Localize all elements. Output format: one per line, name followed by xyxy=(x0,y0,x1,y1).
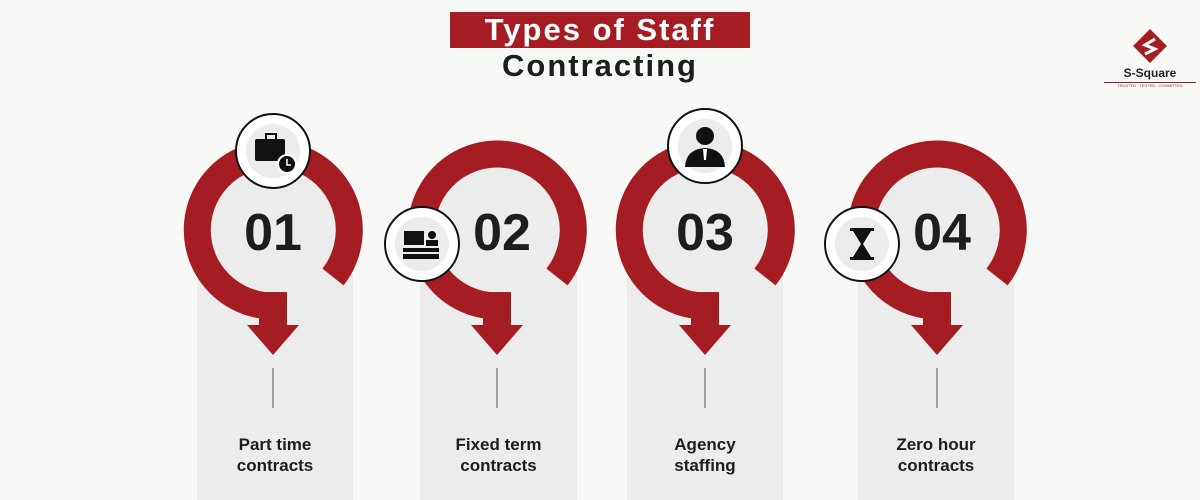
text: 03 xyxy=(676,204,734,262)
label 4: Zero hour xyxy=(896,435,976,454)
text: 04 xyxy=(913,204,971,262)
unit 01 xyxy=(197,154,349,408)
title line 1: Types of Staff xyxy=(485,12,715,47)
unit 02 xyxy=(421,154,573,408)
label 4: contracts xyxy=(898,456,974,475)
label 3 xyxy=(674,435,736,475)
unit 04 xyxy=(861,154,1013,408)
label 4 xyxy=(896,435,976,475)
label 3: Agency xyxy=(674,435,736,454)
text: 02 xyxy=(473,204,531,262)
logo xyxy=(1104,29,1196,88)
label 1 xyxy=(237,435,313,475)
title xyxy=(450,12,750,83)
numbers: 01 xyxy=(244,204,302,262)
icon: briefcase xyxy=(236,114,310,188)
logo: S-Square xyxy=(1124,66,1176,80)
label 2: contracts xyxy=(460,456,537,475)
label 1: contracts xyxy=(237,456,313,475)
icon: hourglass xyxy=(825,207,899,281)
unit 03 xyxy=(629,154,781,408)
panels xyxy=(197,270,1014,500)
label 2 xyxy=(456,435,541,475)
icon: person xyxy=(668,109,742,183)
label 2: Fixed term xyxy=(456,435,541,454)
label 1: Part time xyxy=(239,435,311,454)
icon: desk xyxy=(385,207,459,281)
label 3: staffing xyxy=(674,456,736,475)
logo: TRUSTED . TESTED . COMMITTED xyxy=(1117,83,1183,88)
title line 2: Contracting xyxy=(502,48,698,83)
